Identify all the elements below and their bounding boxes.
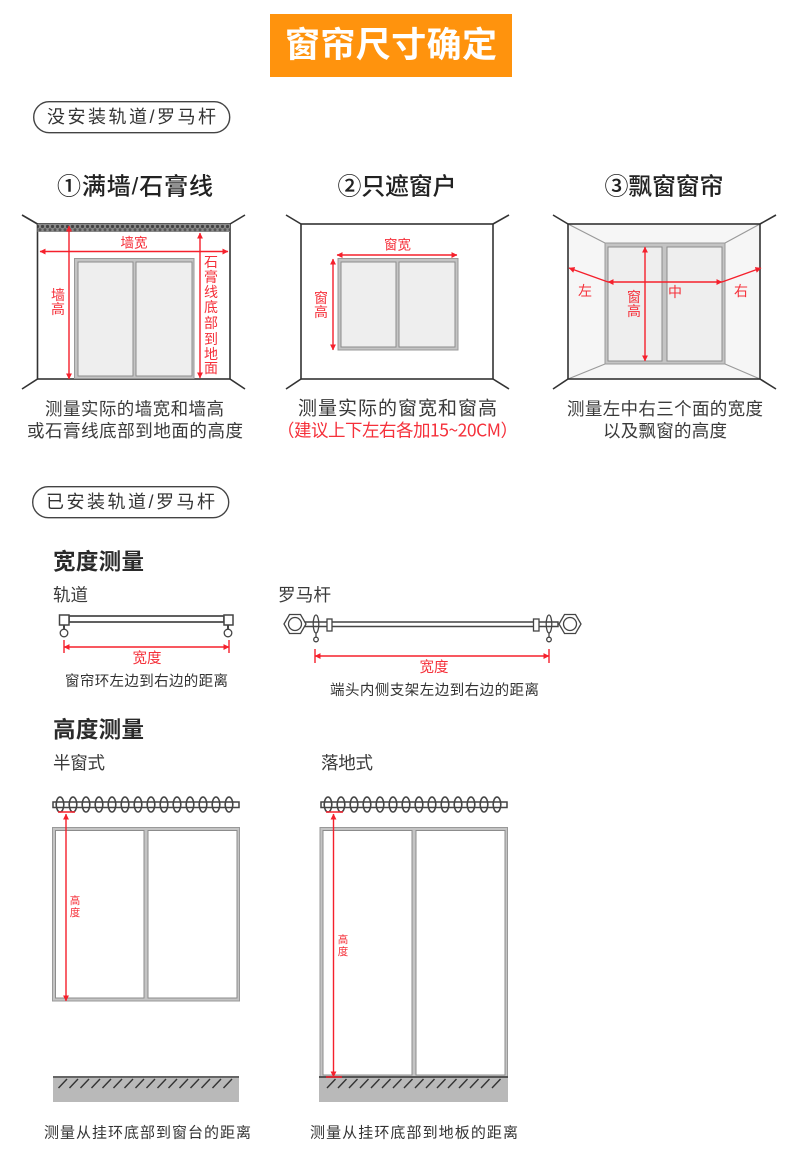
diagram: full wall (22, 215, 245, 389)
diagram: half window (52, 797, 240, 1102)
panel: window only (277, 174, 518, 442)
panel: half window height (44, 753, 251, 1142)
diagram: full wall: 膏 (204, 269, 218, 285)
diagram: bay window (553, 215, 776, 389)
panel: roman rod width (278, 585, 581, 699)
caption: full wall: 测量实际的墙宽和墙高 (45, 399, 224, 419)
heading: bay window: ③飘窗窗帘 (604, 174, 724, 200)
heading: width measurement: 宽度测量 (53, 548, 144, 574)
diagram: window only: 高 (314, 304, 328, 320)
caption: floor length: 测量从挂环底部到地板的距离 (310, 1124, 518, 1142)
diagram: roman rod (284, 614, 581, 676)
diagram: bay window: 窗 (627, 289, 641, 305)
panel: bay window: 以及飘窗的高度 (603, 421, 727, 441)
label: track: 轨道 (53, 585, 88, 605)
panel: track width (53, 585, 233, 690)
label: floor length: 落地式 (321, 753, 373, 773)
title banner: 窗帘尺寸确定 (285, 26, 497, 65)
diagram: window only: 窗宽 (384, 236, 411, 252)
diagram: bay window: 左 (578, 283, 592, 299)
diagram: track: 宽度 (132, 650, 162, 667)
diagram: half window: 高 (70, 894, 80, 907)
diagram: bay window: 右 (734, 283, 748, 299)
label: roman rod: 罗马杆 (278, 585, 331, 605)
caption: track: 窗帘环左边到右边的距离 (65, 672, 228, 690)
panel: window only: （建议上下左右各加15~20CM） (277, 418, 518, 442)
diagram: full wall: 石 (204, 254, 218, 270)
caption: half window: 测量从挂环底部到窗台的距离 (44, 1124, 251, 1142)
panel: full wall: 或石膏线底部到地面的高度 (27, 421, 243, 441)
pill heading: installed: 已安装轨道/罗马杆 (46, 492, 215, 512)
panel: floor length height (310, 753, 518, 1142)
panel: full wall (22, 174, 245, 441)
diagram: half window: 度 (70, 906, 81, 919)
diagram: floor length: 度 (338, 945, 349, 958)
diagram: track (60, 615, 233, 667)
pill heading: installed (33, 487, 229, 518)
panel: bay window (553, 174, 776, 441)
label: half window: 半窗式 (53, 753, 105, 773)
diagram: full wall: 线 (204, 284, 218, 300)
diagram: full wall: 地 (204, 346, 218, 362)
heading: height measurement: 高度测量 (53, 718, 144, 742)
diagram: full wall: 墙宽 (120, 234, 148, 250)
diagram: bay window: 中 (668, 284, 682, 300)
diagram: full wall: 面 (204, 360, 218, 376)
diagram: full wall: 墙 (51, 287, 65, 303)
diagram: full wall: 高 (51, 301, 65, 317)
diagram: floor length: 高 (338, 933, 348, 946)
title banner (270, 14, 512, 77)
diagram: full wall: 底 (204, 299, 218, 315)
pill heading: not installed (34, 102, 230, 133)
diagram: roman rod: 宽度 (420, 659, 448, 676)
diagram: bay window: 高 (627, 303, 641, 319)
caption: roman rod: 端头内侧支架左边到右边的距离 (330, 682, 539, 699)
diagram: full wall: 到 (204, 331, 218, 347)
diagram: window only (286, 215, 509, 389)
diagram: full wall: 部 (204, 315, 218, 331)
pill heading: not installed: 没安装轨道/罗马杆 (47, 107, 216, 127)
caption: window only: 测量实际的窗宽和窗高 (298, 398, 497, 420)
caption: bay window: 测量左中右三个面的宽度 (567, 399, 763, 419)
diagram: floor length (319, 797, 508, 1102)
heading: window only: ②只遮窗户 (338, 174, 456, 200)
diagram: window only: 窗 (314, 290, 328, 306)
heading: full wall: ①满墙/石膏线 (57, 174, 213, 200)
